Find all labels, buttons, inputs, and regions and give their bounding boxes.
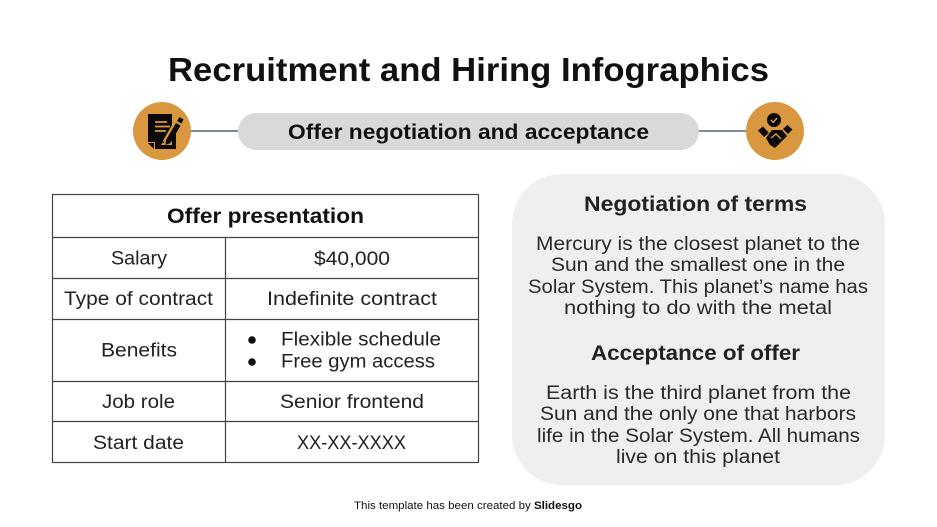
subtitle pill: Offer negotiation and acceptance bbox=[288, 120, 649, 144]
row: salary bbox=[111, 248, 390, 270]
text: negotiation description: nothing to do with the metal bbox=[564, 298, 832, 319]
text: negotiation description: Sun and the smallest one in the bbox=[551, 255, 845, 276]
row: benefits: Flexible schedule bbox=[281, 330, 441, 350]
text: acceptance description: Earth is the third planet from the bbox=[546, 383, 851, 404]
table: offer presentation bbox=[52, 194, 478, 462]
row: benefits bbox=[101, 330, 441, 372]
row: type of contract: Type of contract bbox=[64, 289, 214, 310]
panel: negotiation and acceptance bbox=[512, 174, 885, 485]
icon: handshake with check badge bbox=[746, 102, 804, 160]
row: start date: XX-XX-XXXX bbox=[297, 433, 406, 454]
text: acceptance description bbox=[537, 383, 860, 468]
heading: negotiation of terms: Negotiation of terms bbox=[584, 193, 807, 216]
subtitle pill bbox=[238, 113, 699, 150]
row: benefits: Benefits bbox=[101, 340, 177, 362]
footer credit: This template has been created by Slidesgo bbox=[354, 500, 582, 512]
icon: contract document and pen bbox=[133, 102, 191, 160]
text: negotiation description: Mercury is the closest planet to the bbox=[536, 234, 860, 255]
heading: acceptance of offer: Acceptance of offer bbox=[591, 342, 800, 365]
text: acceptance description: live on this planet bbox=[616, 447, 781, 468]
text: negotiation description: Solar System. This planet’s name has bbox=[528, 277, 868, 298]
row: job role: Job role bbox=[102, 392, 175, 413]
text: acceptance description: Sun and the only one that harbors bbox=[540, 404, 856, 425]
row: type of contract bbox=[64, 289, 438, 310]
row: salary: $40,000 bbox=[314, 249, 390, 270]
table heading: Offer presentation bbox=[167, 205, 364, 228]
title: Recruitment and Hiring Infographics bbox=[168, 51, 769, 88]
row: benefits: Free gym access bbox=[281, 352, 435, 372]
text: negotiation description bbox=[528, 234, 868, 319]
row: start date: Start date bbox=[93, 433, 184, 454]
row: job role bbox=[102, 392, 424, 413]
row: type of contract: Indefinite contract bbox=[267, 289, 438, 310]
header banner bbox=[133, 102, 804, 160]
row: job role: Senior frontend bbox=[280, 392, 424, 413]
row: salary: Salary bbox=[111, 248, 168, 270]
text: acceptance description: life in the Solar System. All humans bbox=[537, 426, 860, 447]
row: start date bbox=[93, 433, 406, 454]
